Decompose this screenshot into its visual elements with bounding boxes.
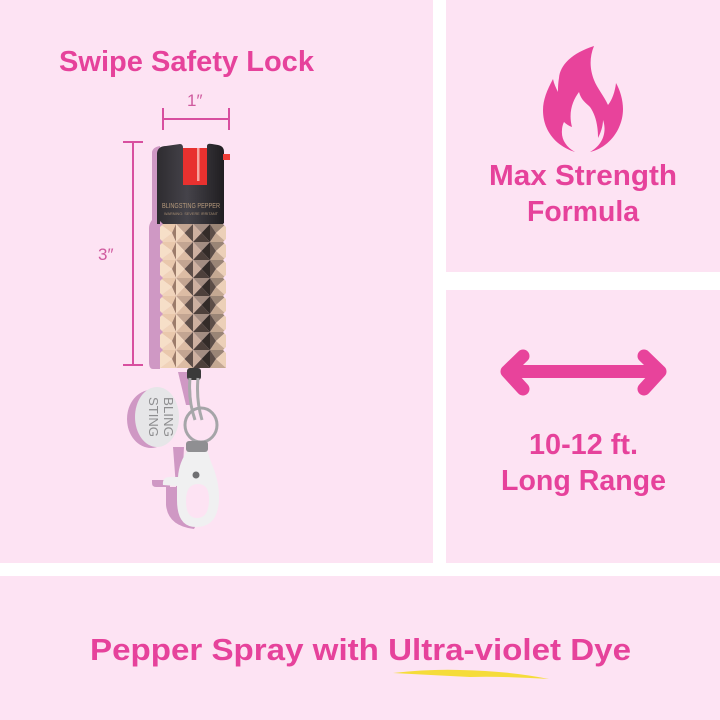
tag engraving: BLING: [161, 397, 176, 437]
heading: long range: 10-12 ft.: [529, 429, 638, 461]
icon: double arrow: [507, 356, 660, 389]
dimension: width 1 inch: 1″: [187, 91, 202, 110]
dimension: height 3 inch: [98, 142, 143, 365]
product shadow: [149, 146, 196, 529]
clasp rivet: [192, 472, 200, 478]
tag engraving: STING: [146, 397, 161, 437]
heading: swipe safety lock: Swipe Safety Lock: [59, 46, 315, 78]
red tab: [223, 154, 230, 160]
warning text: WARNING: SEVERE IRRITANT: [164, 211, 219, 216]
label text: BLINGSTING PEPPER: [162, 203, 220, 210]
pepper spray canister: [157, 144, 230, 368]
icon: flame: [543, 46, 623, 152]
cap: [157, 144, 224, 224]
clasp neck: [186, 441, 208, 452]
panel: product: [0, 0, 433, 563]
dimension: height 3 inch: 3″: [98, 245, 113, 264]
keychain: [127, 368, 219, 527]
panel: max strength: [446, 0, 720, 272]
panel: bottom banner: [0, 576, 720, 720]
tag engraving: [146, 397, 176, 437]
heading: long range: [501, 429, 666, 497]
dimension: width 1 inch: [163, 91, 229, 130]
studded body: [160, 221, 226, 368]
heading: max strength: [489, 160, 677, 228]
heading: long range: Long Range: [501, 465, 666, 497]
clasp: [163, 450, 219, 527]
split ring: [185, 408, 217, 442]
red safety lock: [183, 148, 207, 185]
heading: pepper spray with ultra-violet dye: Pepper Spray with Ultra-violet Dye: [90, 632, 631, 667]
heading: max strength: Formula: [527, 196, 640, 228]
disc shadow: [127, 390, 175, 448]
yellow underline: [393, 670, 549, 679]
panel: long range: [446, 290, 720, 563]
tag disc: [135, 387, 179, 447]
connector: [187, 368, 201, 380]
heading: max strength: Max Strength: [489, 160, 677, 192]
wire loop: [190, 378, 202, 420]
